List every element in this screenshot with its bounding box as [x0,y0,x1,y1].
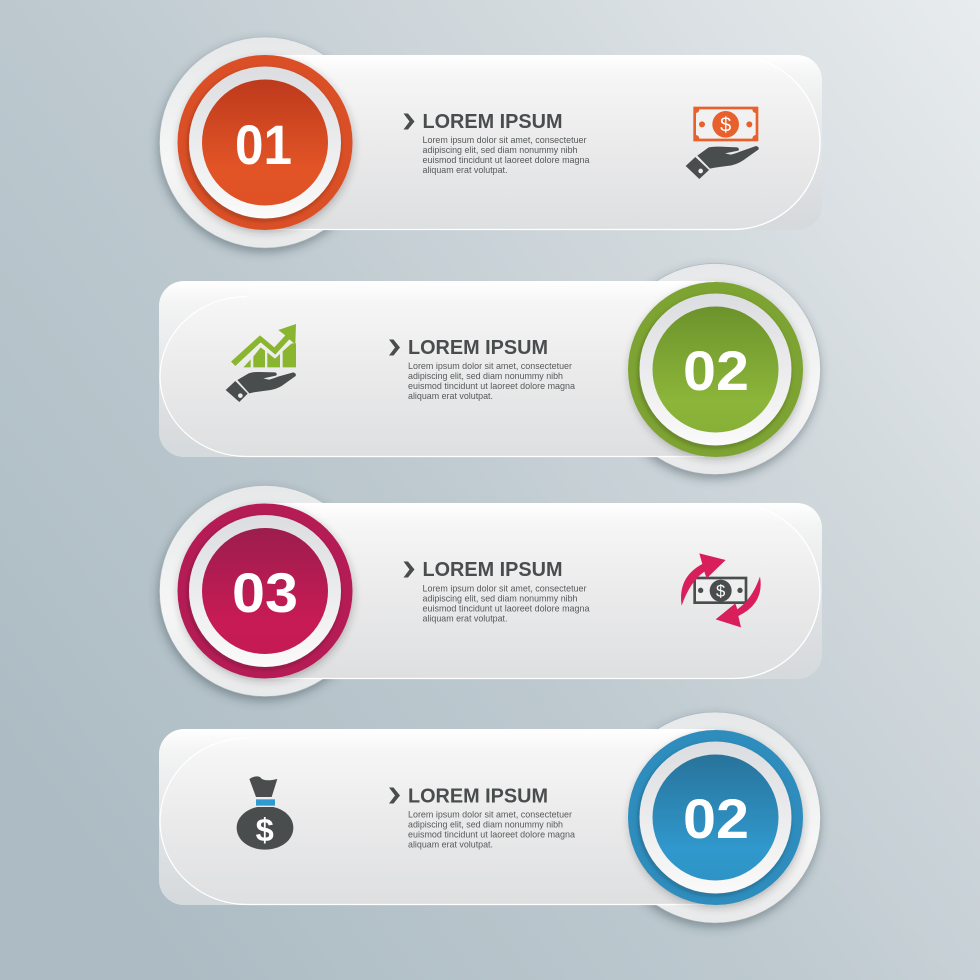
number: 02 [683,339,749,402]
icon: growth chart in hand [226,324,296,402]
body text [422,135,590,175]
inner disc [652,754,778,880]
text block [389,337,576,401]
banner [159,729,715,905]
icon: money exchange arrows [681,553,761,627]
chevron [404,562,414,578]
colour ring [628,282,803,457]
panel: step 02 [159,264,820,474]
body text: euismod tincidunt ut laoreet dolore magna [408,381,576,391]
banner [265,503,822,679]
panel: step 03 [160,486,822,696]
colour ring [628,730,803,905]
white ring [189,66,341,218]
text block [404,111,590,175]
heading: LOREM IPSUM [408,337,548,359]
body text: adipiscing elit, sed diam nonummy nibh [408,371,563,381]
body text: euismod tincidunt ut laoreet dolore magna [422,155,590,165]
body text [422,584,590,624]
icon: money in hand [686,107,759,179]
banner corner tint [159,729,247,905]
body text: aliquam erat volutpat. [408,840,493,850]
icon: money in hand: $ [720,114,731,136]
panel: step 01 [160,37,822,248]
number: 03 [232,561,298,624]
banner outline arc [265,504,820,678]
inner disc [202,80,328,206]
panel: step 04 [159,712,820,923]
body text: Lorem ipsum dolor sit amet, consectetuer [408,361,572,371]
banner corner tint [733,55,822,230]
outer white disc [610,264,820,474]
banner [159,281,715,457]
body text [408,361,576,401]
text block [389,786,576,850]
body text: adipiscing elit, sed diam nonummy nibh [408,820,563,830]
body text: aliquam erat volutpat. [422,614,508,624]
icon: money bag: $ [256,811,274,848]
body text: euismod tincidunt ut laoreet dolore magna [422,604,590,614]
outer white disc [160,37,370,248]
chevron [389,788,400,804]
banner [265,55,822,230]
body text: Lorem ipsum dolor sit amet, consectetuer [408,810,572,820]
inner disc [202,528,328,654]
banner outline arc [265,56,820,230]
banner corner tint [733,503,822,679]
body text: aliquam erat volutpat. [408,391,493,401]
banner outline arc [160,296,715,456]
banner corner tint [159,281,247,457]
number: 02 [683,787,749,850]
heading: LOREM IPSUM [408,786,548,808]
heading: LOREM IPSUM [422,559,562,581]
chevron [404,114,414,130]
body text: Lorem ipsum dolor sit amet, consectetuer [422,584,586,594]
white ring [640,742,792,894]
outer white disc [160,486,370,696]
icon: money exchange arrows: $ [716,582,725,601]
icon: money bag [237,776,293,850]
banner outline arc [160,738,715,904]
body text: euismod tincidunt ut laoreet dolore magna [408,830,576,840]
white ring [640,294,792,446]
body text: Lorem ipsum dolor sit amet, consectetuer [422,135,586,145]
body text: adipiscing elit, sed diam nonummy nibh [422,594,578,604]
number: 01 [235,113,292,176]
heading: LOREM IPSUM [422,111,562,133]
chevron [389,340,400,356]
white ring [189,515,341,667]
outer white disc [610,712,820,923]
body text: adipiscing elit, sed diam nonummy nibh [422,145,578,155]
body text [408,810,576,850]
body text: aliquam erat volutpat. [422,165,508,175]
colour ring [178,55,352,230]
colour ring [178,504,352,678]
inner disc [652,306,778,432]
text block [404,559,590,624]
